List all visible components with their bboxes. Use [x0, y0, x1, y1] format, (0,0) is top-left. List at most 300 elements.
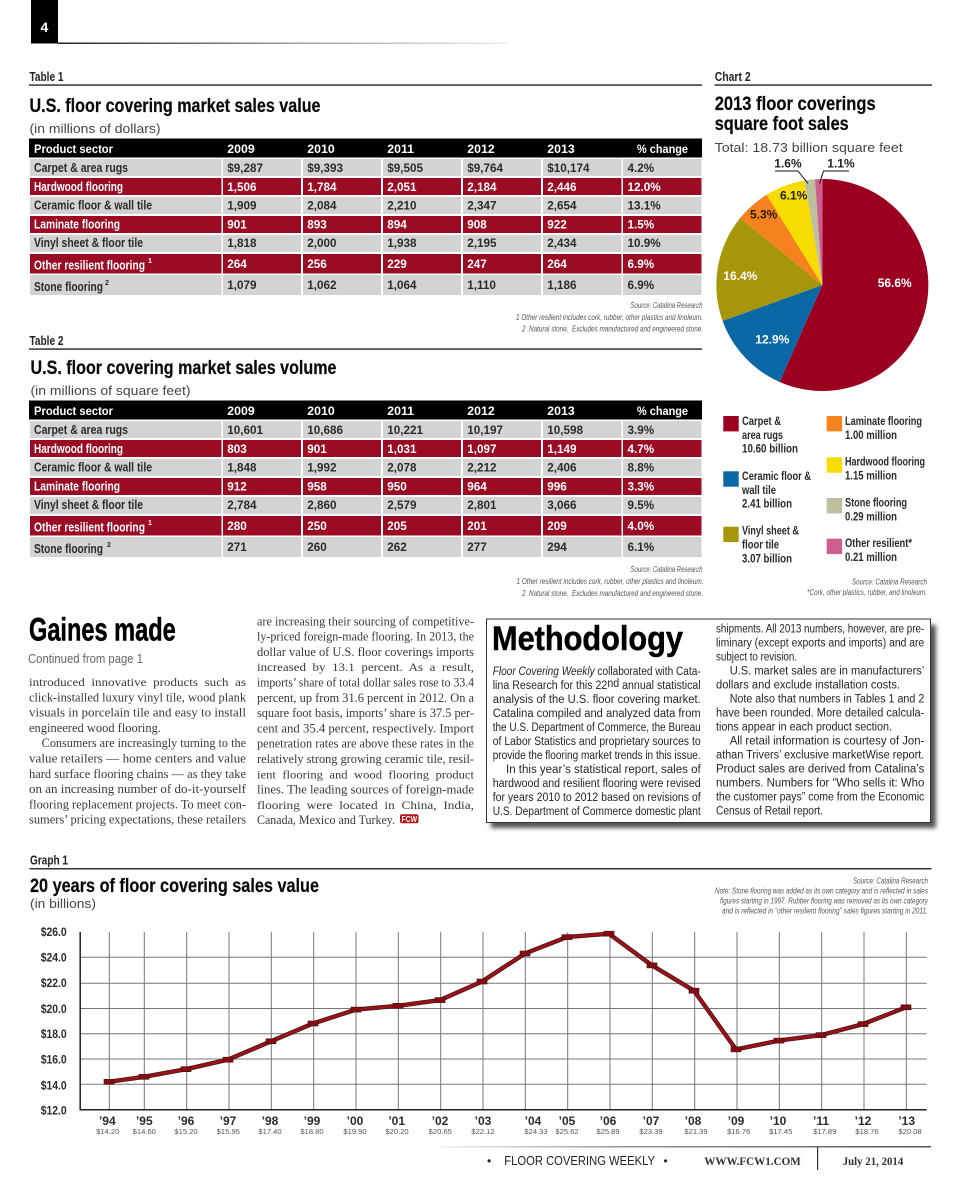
table 1 subheading: (in millions of dollars): [30, 121, 160, 136]
x axis value labels: [96, 1127, 922, 1136]
table 1 row: hardwood: 2,184: [467, 181, 497, 194]
table 1 row: vinyl: 2,434: [547, 237, 577, 250]
legend: other resilient: 0.21 million: [845, 550, 897, 564]
table 2 row: carpet: 10,197: [467, 424, 503, 437]
pie chart: 56.6%: [878, 276, 912, 290]
legend: carpet: area rugs: [742, 428, 783, 442]
continued line: Continued from page 1: [28, 652, 143, 666]
methodology column 1: Catalina compiled and analyzed data from: [493, 708, 701, 720]
pie chart: 5.3%: [750, 207, 778, 221]
table 1 row: carpet: 4.2%: [628, 162, 655, 175]
x axis year labels: ’97: [220, 1114, 237, 1128]
methodology column 2: have been rounded. More detailed calcula-: [716, 708, 924, 720]
chart 2 source notes: [807, 577, 927, 597]
methodology column 1: annual statistical: [619, 680, 701, 692]
table 1 row: stone: 6.9%: [628, 279, 655, 292]
table 2 subheading: (in millions of square feet): [30, 383, 190, 398]
table 2 header row: 2013: [547, 404, 575, 418]
x axis value labels: $14.20: [96, 1127, 119, 1136]
legend: vinyl: floor tile: [742, 537, 779, 551]
article column 2: ly-priced foreign-made flooring. In 2013, the: [257, 630, 474, 644]
table 1 source notes: Source: Catalina Research: [630, 300, 703, 310]
table 2 row: hardwood: 901: [307, 443, 327, 456]
table 2 source notes: 2 Natural stone. Excludes manufactured and engineered stone.: [521, 588, 703, 598]
footer: [440, 1146, 931, 1170]
x axis value labels: $24.33: [524, 1127, 548, 1136]
legend: vinyl: 3.07 billion: [742, 551, 792, 565]
table 2 row: other resilient: 4.0%: [628, 520, 655, 533]
table 1 row: carpet: [30, 159, 702, 176]
legend: hardwood: [827, 455, 925, 483]
x axis year labels: ’02: [432, 1114, 449, 1128]
table 2 row: stone: [30, 537, 702, 557]
table 1 row: laminate: 901: [227, 218, 247, 232]
table 1 header row: 2009: [227, 142, 255, 156]
table 1 row: laminate: 908: [467, 218, 487, 232]
table 2 row: ceramic: 2,212: [467, 462, 497, 474]
y axis labels: [41, 925, 67, 1118]
article column 2: dollar value of U.S. floor coverings imports: [257, 645, 474, 659]
table 2 row: laminate: 950: [387, 480, 407, 494]
x axis year labels: ’96: [178, 1114, 195, 1128]
chart 2 total: Total: 18.73 billion square feet: [715, 140, 903, 155]
legend: ceramic: wall tile: [741, 483, 776, 497]
methodology column 1: lina Research for this 22: [493, 680, 617, 692]
table 1 row: vinyl: [30, 235, 702, 252]
table 2 source notes: [516, 564, 704, 598]
legend: ceramic: 2.41 billion: [742, 497, 792, 511]
article column 2: ient flooring and wood flooring product: [257, 768, 475, 781]
table 2 header row: 2012: [467, 404, 495, 418]
chart 2 heading: [715, 94, 876, 135]
table 1 source notes: 1 Other resilient includes cork, rubber, other plastics and linoleum.: [516, 312, 703, 322]
table 1 row: stone: [30, 275, 702, 295]
table 1 row: ceramic: [30, 197, 702, 214]
legend: vinyl: [723, 523, 799, 565]
table 1 row: carpet: $10,174: [547, 162, 590, 175]
methodology column 2: tions appear in each product section.: [716, 722, 892, 734]
x axis value labels: $20.08: [898, 1127, 922, 1136]
footer date: July 21, 2014: [843, 1156, 904, 1168]
table 1 row: stone: 1,064: [387, 279, 417, 292]
x axis value labels: $23.39: [639, 1127, 663, 1136]
table 1 row: carpet: $9,287: [227, 162, 263, 175]
panel: Methodology box: [486, 619, 936, 828]
table 2 row: carpet: 10,686: [307, 424, 344, 437]
methodology column 2: liminary (except exports and imports) and are: [716, 638, 924, 650]
table 2 row: other resilient: 280: [227, 520, 247, 533]
table 2 row: carpet: [30, 421, 702, 438]
table 2 row: vinyl: 2,860: [307, 499, 337, 512]
x axis year labels: ’10: [770, 1114, 787, 1128]
table 2 row: hardwood: Hardwood flooring: [34, 441, 123, 456]
article column 1: Consumers are increasingly turning to the: [42, 736, 246, 750]
table 2 row: other resilient: 201: [467, 520, 487, 533]
legend: carpet: Carpet &: [742, 414, 781, 428]
legend: stone: [827, 495, 907, 523]
x axis year labels: ’01: [388, 1114, 405, 1128]
table 2 header row: Product sector: [34, 404, 113, 418]
x axis year labels: ’08: [685, 1114, 702, 1128]
article column 2: penetration rates are above these rates in the: [257, 737, 474, 751]
panel: table 2 sales volume: [29, 334, 704, 598]
table 2 row: laminate: 3.3%: [628, 480, 655, 494]
table 1 row: other resilient: 264: [227, 258, 247, 271]
legend: other resilient: Other resilient*: [845, 536, 912, 550]
table 1 row: ceramic: 13.1%: [628, 200, 661, 212]
x axis year labels: ’99: [304, 1114, 321, 1128]
x axis year labels: ’98: [262, 1114, 279, 1128]
table 1 row: other resilient: 229: [387, 258, 407, 271]
panel: Gaines made article: [28, 612, 475, 827]
legend: other resilient: [827, 536, 912, 564]
line chart: [41, 925, 927, 1136]
table 2 row: laminate: 996: [547, 480, 567, 494]
methodology column 2: athan Trivers’ exclusive marketWise report.: [716, 750, 924, 762]
table 1 header row: 2010: [307, 142, 335, 156]
table 2 row: stone: 6.1%: [628, 541, 655, 554]
pie chart: 12.9%: [755, 332, 790, 346]
article column 2: square foot basis, imports’ share is 37.5 per-: [257, 706, 474, 720]
table 1 row: laminate: 893: [307, 218, 327, 232]
y axis labels: $14.0: [41, 1078, 67, 1092]
table 2 row: vinyl: 2,579: [387, 499, 417, 512]
table 2 row: vinyl: [30, 497, 702, 514]
table 1 row: laminate: 1.5%: [628, 218, 655, 232]
table 1 row: vinyl: Vinyl sheet & floor tile: [34, 235, 143, 250]
table 2 row: other resilient: 205: [387, 520, 407, 533]
table 1 row: laminate: 922: [547, 218, 567, 232]
article column 1: engineered wood flooring.: [29, 721, 161, 735]
table 1 header row: Product sector: [34, 142, 113, 156]
methodology column 1: of Labor Statistics and proprietary sources to: [493, 736, 701, 748]
y axis labels: $22.0: [41, 976, 67, 990]
table 1 row: ceramic: 1,909: [227, 200, 257, 212]
methodology column 2: Census of Retail report.: [716, 806, 823, 818]
x axis value labels: $20.20: [385, 1127, 409, 1136]
table 1 row: ceramic: 2,210: [387, 200, 417, 212]
table 2 row: ceramic: 1,848: [227, 462, 257, 474]
table 1 row: hardwood: Hardwood flooring: [34, 179, 123, 194]
pie chart: 1.1%: [827, 157, 855, 171]
table 2 row: vinyl: Vinyl sheet & floor tile: [34, 497, 143, 512]
legend: hardwood: Hardwood flooring: [845, 455, 925, 469]
table 2 row: laminate: 964: [467, 480, 487, 494]
methodology column 1: In this year’s statistical report, sales of: [506, 764, 701, 776]
table 2 row: hardwood: 1,097: [467, 443, 497, 456]
y axis labels: $12.0: [41, 1104, 67, 1118]
x axis year labels: ’11: [813, 1114, 829, 1128]
footer website: WWW.FCW1.COM: [704, 1156, 801, 1168]
table 1 row: vinyl: 10.9%: [628, 237, 661, 250]
table 2 row: hardwood: 803: [227, 443, 247, 456]
table 1 header row: 2012: [467, 142, 495, 156]
x axis value labels: $18.80: [300, 1127, 324, 1136]
pie chart: 6.1%: [780, 188, 808, 202]
table 1 row: carpet: $9,764: [467, 162, 504, 175]
table 2 row: carpet: Carpet & area rugs: [34, 422, 128, 437]
article column 1: flooring replacement projects. To meet con-: [29, 797, 246, 811]
methodology column 1: provide the flooring market trends in this issue.: [493, 750, 701, 762]
table 2 row: ceramic: 8.8%: [628, 462, 655, 474]
table 2 heading: U.S. floor covering market sales volume: [30, 358, 336, 379]
table 2 row: stone: 271: [227, 541, 247, 554]
table 2 row: stone: 262: [387, 541, 407, 554]
table 1 row: other resilient: 247: [467, 258, 487, 271]
table 1 row: carpet: $9,505: [387, 162, 424, 175]
methodology column 2: All retail information is courtesy of Jon-: [730, 736, 924, 748]
table 1 header row: 2011: [387, 142, 414, 156]
table 2 header row: 2010: [307, 404, 335, 418]
methodology column 2: shipments. All 2013 numbers, however, are pre-: [716, 624, 924, 636]
article column 2: [257, 614, 475, 827]
table 1 row: vinyl: 2,000: [307, 237, 337, 250]
table 2 header row: 2009: [227, 404, 255, 418]
table 2 row: stone: 294: [547, 541, 567, 554]
table 2 row: vinyl: 2,784: [227, 499, 257, 512]
article headline: Gaines made: [29, 612, 176, 648]
x axis value labels: $22.12: [471, 1127, 495, 1136]
icon: FCW end badge: FCW: [402, 815, 417, 824]
table 2 label: Table 2: [30, 334, 64, 348]
methodology column 1: hardwood and resilient flooring were revised: [493, 778, 701, 790]
methodology column 2: subject to revision.: [716, 652, 797, 664]
graph 1 heading: 20 years of floor covering sales value: [30, 876, 319, 897]
table 2 row: other resilient: 1: [148, 520, 152, 527]
y axis labels: $16.0: [41, 1053, 67, 1067]
graph 1 source notes: [715, 875, 929, 916]
methodology column 1: [493, 666, 701, 818]
methodology column 2: U.S. market sales are in manufacturers’: [730, 666, 924, 678]
article column 1: value retailers — home centers and value: [29, 752, 246, 766]
article column 2: imports’ share of total dollar sales rose to 33.4: [257, 676, 474, 690]
table 1 row: ceramic: 2,347: [467, 200, 497, 212]
table 1 row: vinyl: 2,195: [467, 237, 497, 250]
x axis value labels: $17.45: [769, 1127, 792, 1136]
table 1 row: other resilient: 6.9%: [628, 258, 655, 271]
page number tab: [31, 0, 508, 44]
table 2 row: laminate: 912: [227, 480, 247, 494]
methodology column 1: the U.S. Department of Commerce, the Bureau: [493, 722, 701, 734]
article column 1: introduced innovative products such as: [29, 676, 247, 689]
table 1 row: stone: 1,110: [467, 279, 496, 292]
x axis year labels: [99, 1114, 915, 1128]
x axis value labels: $25.89: [596, 1127, 620, 1136]
table 2 row: vinyl: 9.5%: [628, 499, 655, 512]
panel: chart 2 pie: [715, 70, 932, 597]
table 2 row: laminate: Laminate flooring: [34, 478, 120, 494]
x axis year labels: ’00: [347, 1114, 364, 1128]
x axis year labels: ’12: [855, 1114, 872, 1128]
x axis value labels: $25.62: [555, 1127, 579, 1136]
table 1 row: hardwood: 2,446: [547, 181, 577, 194]
table 1 heading: U.S. floor covering market sales value: [30, 96, 320, 117]
table 2 row: stone: 260: [307, 541, 327, 554]
article column 2: increased by 13.1 percent. As a result,: [257, 661, 474, 674]
x axis year labels: ’09: [728, 1114, 745, 1128]
legend: vinyl: Vinyl sheet &: [742, 523, 799, 537]
legend: laminate: Laminate flooring: [845, 414, 922, 428]
chart 2 heading: 2013 floor coverings: [715, 94, 876, 115]
table 2 row: laminate: [30, 478, 702, 495]
pie legend: [723, 414, 925, 565]
table 2 row: carpet: 10,221: [387, 424, 424, 437]
article column 2: flooring were located in China, India,: [257, 799, 474, 812]
pie chart: 1.6%: [774, 157, 802, 171]
sales line: [104, 931, 911, 1084]
pie chart: 16.4%: [723, 269, 758, 283]
table 2 row: other resilient: 250: [307, 520, 327, 533]
legend: stone: 0.29 million: [845, 509, 897, 523]
table 2 source notes: 1 Other resilient includes cork, rubber, other plastics and linoleum.: [516, 576, 704, 586]
table 1 row: stone: 1,079: [227, 279, 257, 292]
chart 2 label: Chart 2: [715, 70, 751, 84]
table 1 row: stone: 1,062: [307, 279, 337, 292]
footer publication name: FLOOR COVERING WEEKLY: [504, 1154, 656, 1168]
article column 1: click-installed luxury vinyl tile, wood plank: [29, 690, 247, 704]
table 1 label: Table 1: [30, 70, 64, 84]
methodology column 2: the customer pays” come from the Economic: [716, 792, 925, 804]
table 2 row: laminate: 958: [307, 480, 327, 494]
table 1 row: hardwood: 2,051: [387, 181, 417, 194]
x axis year labels: ’03: [475, 1114, 492, 1128]
table 2 row: hardwood: 1,031: [387, 443, 417, 456]
table 1 row: other resilient: 256: [307, 258, 327, 271]
graph 1 source notes: Source: Catalina Research: [853, 875, 928, 885]
table 1 row: laminate: Laminate flooring: [34, 216, 120, 232]
table 1 row: vinyl: 1,818: [227, 237, 257, 250]
table 2 row: vinyl: 3,066: [547, 499, 577, 512]
table 1 row: hardwood: 1,506: [227, 181, 257, 194]
x axis year labels: ’05: [559, 1114, 576, 1128]
legend: ceramic: [723, 469, 811, 511]
table 1 row: carpet: $9,393: [307, 162, 344, 175]
legend: stone: Stone flooring: [845, 495, 907, 509]
table 2 row: other resilient: 209: [547, 520, 567, 533]
article column 2: percent, up from 31.6 percent in 2012. On a: [257, 691, 475, 705]
table 1 source notes: [516, 300, 703, 334]
x axis year labels: ’04: [525, 1114, 542, 1128]
y axis labels: $20.0: [41, 1002, 67, 1016]
panel: graph 1: [30, 854, 932, 1136]
article column 2: Canada, Mexico and Turkey.: [257, 813, 395, 827]
x axis year labels: ’95: [136, 1114, 153, 1128]
footer publication name: •: [487, 1154, 491, 1168]
table 2 row: stone: Stone flooring: [34, 541, 103, 556]
methodology heading: Methodology: [492, 620, 683, 658]
x axis value labels: $16.76: [727, 1127, 750, 1136]
article column 2: relatively strong growing ceramic tile, resil-: [257, 752, 474, 766]
table 1 row: vinyl: 1,938: [387, 237, 417, 250]
methodology column 1: for years 2010 to 2012 based on revisions of: [493, 792, 701, 804]
table 1 row: laminate: 894: [387, 218, 407, 232]
table 1 row: laminate: [30, 216, 702, 233]
legend: laminate: 1.00 million: [845, 428, 897, 442]
methodology column 1: analysis of the U.S. floor covering market.: [493, 694, 701, 706]
table 2 header row: % change: [637, 404, 688, 418]
table 2 header row: [29, 400, 702, 420]
x axis value labels: $18.76: [855, 1127, 879, 1136]
x axis year labels: ’07: [643, 1114, 660, 1128]
table 1 row: other resilient: 1: [148, 258, 152, 265]
methodology column 2: dollars and exclude installation costs.: [716, 680, 900, 692]
chart 2 source notes: Source: Catalina Research: [852, 577, 927, 587]
x axis value labels: $20.65: [429, 1127, 452, 1136]
table 2 header row: 2011: [387, 404, 414, 418]
page number tab: 4: [40, 19, 48, 35]
legend: ceramic: Ceramic floor &: [742, 469, 811, 483]
graph 1 label: Graph 1: [30, 854, 68, 868]
article column 1: visuals in porcelain tile and easy to install: [29, 706, 247, 720]
methodology column 2: [716, 624, 925, 818]
pie chart: [716, 157, 928, 391]
legend: carpet: 10.60 billion: [742, 442, 798, 456]
x axis year labels: ’06: [600, 1114, 617, 1128]
table 2 row: ceramic: Ceramic floor & wall tile: [34, 460, 152, 474]
table 1 row: hardwood: 1,784: [307, 181, 337, 194]
methodology column 1: nd: [607, 678, 619, 690]
x axis year labels: ’13: [898, 1114, 915, 1128]
x axis value labels: $15.95: [217, 1127, 240, 1136]
legend: carpet: [723, 414, 798, 456]
table 2 row: carpet: 3.9%: [628, 424, 655, 437]
methodology column 1: Floor Covering Weekly collaborated with Cata-: [493, 666, 701, 678]
table 1 row: ceramic: Ceramic floor & wall tile: [34, 198, 152, 212]
x axis value labels: $17.40: [258, 1127, 282, 1136]
y axis labels: $18.0: [41, 1027, 67, 1041]
legend: hardwood: 1.15 million: [845, 469, 897, 483]
x axis value labels: $14.60: [133, 1127, 156, 1136]
table 1 header row: % change: [637, 142, 688, 156]
table 2 row: other resilient: [30, 516, 702, 536]
legend: laminate: [827, 414, 922, 442]
article column 1: on an increasing number of do-it-yourself: [29, 782, 247, 796]
y axis labels: $24.0: [41, 951, 67, 965]
article column 1: [29, 676, 247, 827]
table 2 row: hardwood: 1,149: [547, 443, 577, 456]
graph 1 subheading: (in billions): [30, 896, 96, 911]
table 1 row: other resilient: [30, 254, 702, 274]
table 1 row: ceramic: 2,654: [547, 200, 577, 212]
table 2 row: hardwood: 4.7%: [628, 443, 655, 456]
table 1 row: carpet: Carpet & area rugs: [34, 160, 128, 175]
table 2 row: vinyl: 2,801: [467, 499, 497, 512]
table 1 row: stone: 2: [105, 280, 109, 287]
chart 2 heading: square foot sales: [715, 114, 849, 135]
table 2 row: ceramic: [30, 459, 702, 476]
table 1 row: hardwood: 12.0%: [628, 181, 661, 194]
footer publication name: •: [664, 1154, 668, 1168]
x axis year labels: ’94: [99, 1114, 116, 1128]
methodology column 2: Product sales are derived from Catalina’s: [716, 764, 925, 776]
table 2 source notes: Source: Catalina Research: [630, 564, 703, 574]
panel: table 1 sales value: [29, 70, 703, 334]
table 1 row: other resilient: 264: [547, 258, 567, 271]
table 1 row: ceramic: 2,084: [307, 200, 337, 212]
table 1 source notes: 2 Natural stone. Excludes manufactured and engineered stone.: [521, 324, 703, 334]
y axis labels: $26.0: [41, 925, 67, 939]
article column 1: sumers’ pricing expectations, these retailers: [29, 813, 246, 827]
table 2 row: ceramic: 1,992: [307, 462, 337, 474]
table 2 row: carpet: 10,598: [547, 424, 584, 437]
table 1 row: other resilient: Other resilient flooring: [34, 258, 145, 272]
table 2 row: stone: 277: [467, 541, 487, 554]
table 1 header row: [29, 138, 702, 158]
article column 2: lines. The leading sources of foreign-made: [257, 783, 474, 797]
table 2 row: other resilient: Other resilient flooring: [34, 520, 145, 534]
table 1 row: stone: Stone flooring: [34, 279, 103, 294]
table 1 row: stone: 1,186: [547, 279, 577, 292]
